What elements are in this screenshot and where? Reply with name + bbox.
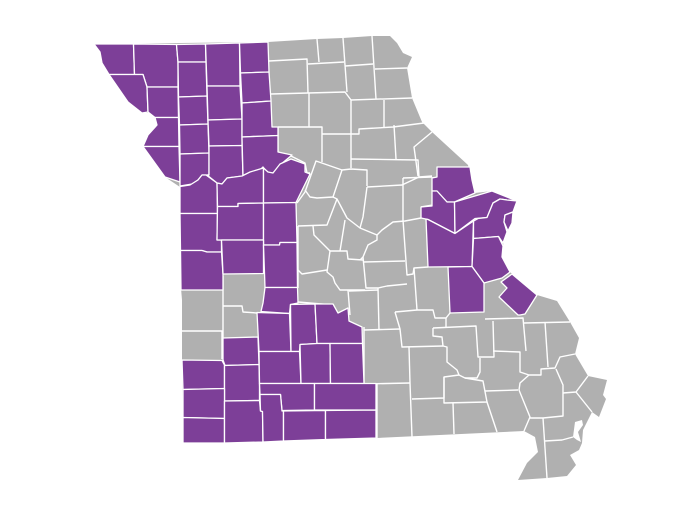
- river inlet in the southeast: [573, 420, 583, 442]
- county: Lawrence: [224, 364, 260, 401]
- county: Dade: [223, 337, 259, 366]
- state silhouette in gray: [94, 36, 607, 480]
- county: Barry: [224, 400, 263, 443]
- county: Bates: [180, 250, 223, 290]
- county: Henry: [222, 240, 264, 274]
- county: Worth: [176, 44, 206, 62]
- county: Hickory: [261, 288, 298, 314]
- gray county borders: [182, 36, 592, 478]
- county: Taney: [284, 410, 326, 441]
- county: Gentry: [178, 62, 207, 97]
- county: Polk: [257, 312, 291, 352]
- county: Jasper: [183, 388, 224, 418]
- county: Holt: [109, 74, 148, 113]
- county: Cass: [180, 214, 222, 252]
- county: Johnson: [217, 203, 264, 240]
- county: Livingston: [242, 101, 278, 137]
- county: Lafayette: [217, 168, 264, 206]
- county: Newton: [183, 418, 224, 443]
- county: Platte: [143, 146, 180, 182]
- county: Daviess: [207, 86, 242, 120]
- county: Franklin: [426, 219, 474, 267]
- county: Grundy: [240, 72, 271, 103]
- county: Webster: [300, 344, 330, 384]
- county: Caldwell: [208, 119, 242, 146]
- county: Saline: [264, 159, 310, 203]
- county: Benton: [264, 242, 298, 288]
- county: Jefferson: [472, 236, 510, 283]
- county: Wright: [330, 344, 364, 384]
- county: Warren: [421, 191, 455, 234]
- county: St. Charles: [454, 191, 517, 234]
- county: Lincoln: [432, 167, 475, 202]
- county: Ste. Genevieve: [499, 274, 537, 315]
- county: Greene: [259, 352, 301, 384]
- county: Nodaway: [134, 44, 178, 87]
- county: Ozark: [326, 410, 376, 440]
- county: Stone: [260, 394, 284, 442]
- county: Jackson: [180, 175, 218, 214]
- county: St. Louis City: [504, 212, 513, 231]
- county: Atchison: [94, 44, 134, 74]
- county: Douglas: [314, 384, 376, 410]
- county: Clay: [180, 153, 209, 186]
- county: Washington: [448, 266, 484, 313]
- county: Carroll: [242, 136, 292, 176]
- purple counties: [94, 42, 537, 443]
- county: Ray: [207, 146, 243, 184]
- county: Harrison: [206, 43, 240, 86]
- county: Pettis: [264, 202, 297, 245]
- county: Barton: [182, 360, 224, 390]
- county: St. Louis: [474, 199, 517, 243]
- county: Clinton: [180, 124, 209, 154]
- county: Dallas: [290, 304, 317, 352]
- county: Buchanan: [143, 118, 179, 146]
- county: Andrew: [147, 87, 178, 118]
- county: Christian: [260, 384, 314, 410]
- county: Mercer: [240, 42, 269, 73]
- county: Laclede: [315, 304, 362, 344]
- county: DeKalb: [178, 96, 208, 125]
